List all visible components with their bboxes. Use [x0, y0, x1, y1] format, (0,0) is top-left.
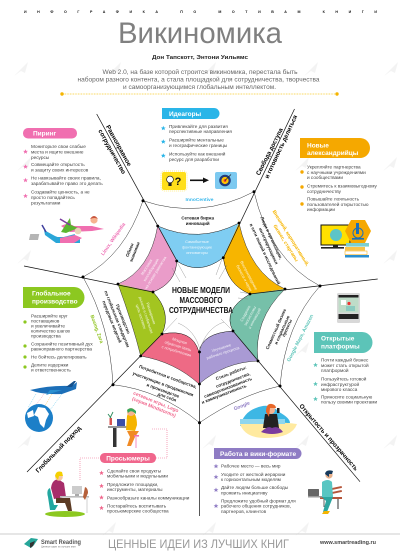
caption: pink — [134, 249, 168, 290]
list: Совмещайте открытость — [31, 161, 85, 167]
list: пользователей открытостью — [307, 201, 369, 207]
segment: blue — [158, 223, 239, 268]
pill: производство — [32, 298, 78, 306]
list: Приносите социальную — [321, 394, 373, 400]
list: партнеров, клиентов — [221, 509, 267, 514]
caption: blue: фонтанирующие — [182, 244, 212, 250]
list: Не бойтесь делегировать — [31, 354, 87, 360]
caption: teal — [238, 302, 262, 330]
pill: Открытые — [321, 336, 355, 342]
example: orange: бизнес, стартапы — [272, 223, 300, 263]
list: платформой — [321, 367, 349, 373]
segment: red — [141, 333, 199, 384]
axis: openness: Открытость и прозрачность — [297, 403, 359, 472]
axis: equal cooperation: Равноправное — [104, 124, 133, 168]
example labels — [88, 197, 315, 419]
list: поставщиков — [31, 318, 60, 324]
web nodes — [82, 190, 322, 424]
caption: red: Мощная — [172, 336, 188, 345]
label: work style: и коммуникативность — [201, 383, 247, 405]
list: Рабочее место — весь мир — [221, 464, 281, 468]
label: work style — [201, 365, 253, 405]
example: Boeing: Boeing, Zara — [88, 314, 104, 344]
list: и защиту своих интересов — [31, 168, 89, 172]
list: инструменты, материалы — [107, 487, 163, 492]
list — [221, 464, 296, 514]
slogan: ЦЕННЫЕ ИДЕИ ИЗ ЛУЧШИХ КНИГ — [108, 537, 289, 551]
caption: pink: Массовая — [139, 258, 153, 276]
caption: lime: цепь поставок — [135, 304, 148, 330]
label: joint business: проекты — [281, 318, 293, 337]
caption: red: с потребителями — [161, 344, 192, 358]
list: мобильными и модульными — [107, 474, 168, 478]
pill: Идеагоры — [169, 111, 202, 118]
authors: Дон Тапскотт, Энтони Уильямс — [152, 55, 248, 61]
example: Lego: (серия Mindstorms) — [131, 396, 177, 419]
list: просьюмерские сообщества — [107, 508, 169, 514]
caption: blue: инноваторы — [186, 250, 208, 255]
list: ресурс для разработки — [169, 157, 219, 162]
list: Стремитесь к взаимовыгодному — [307, 184, 378, 188]
list: мирового класса — [321, 387, 358, 392]
caption: orange: Воспроизведение — [239, 260, 259, 291]
centre heading — [169, 286, 233, 315]
label: knowledge exchange: знаниями — [128, 241, 141, 263]
list: пользу своими проектами — [321, 400, 377, 404]
label: knowledge exchange: Обмен — [125, 242, 135, 258]
label: production: Производство — [115, 304, 131, 335]
panel: new alexandrians — [300, 138, 378, 258]
bullets — [23, 149, 28, 198]
label: network exchange: инноваций — [186, 221, 210, 226]
axis: free access: и готовность делиться — [264, 114, 299, 180]
list: и сообществами — [307, 175, 343, 180]
white labels — [101, 216, 293, 405]
list: Постарайтесь воспитывать — [107, 502, 167, 508]
panel: wiki workplace — [214, 448, 302, 514]
caption: lime — [133, 294, 160, 336]
bullets — [300, 170, 304, 206]
connectors — [80, 429, 167, 480]
list: Привлекайте для развития — [169, 123, 228, 129]
caption: teal: Создание — [239, 304, 251, 322]
caption: red — [161, 334, 195, 358]
caption: red: обратная связь — [164, 339, 192, 352]
pill — [314, 332, 373, 353]
list — [31, 144, 103, 205]
list: к горизонтальным моделям — [221, 477, 281, 482]
label: network exchange — [181, 216, 215, 226]
list: и географические границы — [169, 143, 228, 148]
list: Создавайте ценность, а не — [31, 188, 90, 194]
list: Почти каждый бизнес — [321, 356, 369, 362]
axis: free access: Свобода доступа — [254, 126, 285, 177]
segment: purple — [199, 331, 258, 384]
intro text: набором разного контента, а стала площадкой для сотрудничества, творчества — [78, 76, 320, 84]
illustration: monitor and microscope — [321, 220, 371, 258]
bullets — [214, 464, 218, 508]
label: production: передовых моделей — [101, 300, 123, 344]
caption: blue — [182, 239, 212, 255]
segment: pink — [118, 226, 177, 292]
radial lines — [24, 109, 378, 516]
list: проявить инициативу — [221, 490, 268, 496]
list: информации — [307, 207, 335, 212]
caption: lime: Расширение — [145, 302, 157, 325]
segment: orange — [223, 223, 285, 294]
bullets — [161, 126, 166, 158]
list: с научными учреждениями — [307, 170, 366, 175]
label: network exchange: Сетевая биржа — [181, 216, 215, 220]
pill — [300, 138, 370, 158]
label: consumers — [132, 364, 198, 403]
intro text — [78, 69, 320, 91]
logo: Smart Reading — [41, 539, 81, 546]
list: равноправного партнерства — [31, 346, 92, 352]
list: места и ищите внешние — [31, 150, 84, 154]
web threads — [83, 192, 320, 423]
icon: target — [215, 172, 237, 189]
list: Делите издержки — [31, 362, 69, 368]
label: work style: сотрудничество, — [215, 371, 251, 389]
axis: equal cooperation: сотрудничество — [96, 128, 127, 176]
coloured segments — [118, 223, 285, 384]
segment captions — [133, 239, 262, 360]
list — [31, 312, 93, 372]
pill: платформы — [321, 344, 360, 350]
list: Уходите от жесткой иерархии — [221, 471, 286, 477]
list: рабочего общения сотрудников, — [221, 504, 291, 508]
panel: global production — [23, 287, 93, 372]
list: зарабатывайте право это делать — [31, 180, 103, 186]
list — [321, 356, 377, 404]
list: может стать открытой — [321, 362, 369, 368]
intro text: и самоорганизующимся глобальным интеллектом. — [123, 84, 276, 91]
list: Расширяйте круг — [31, 312, 68, 318]
intro text: Web 2.0, на базе которой строится викиномика, перестала быть — [102, 69, 298, 76]
bullets — [313, 362, 318, 401]
centre heading: НОВЫЕ МОДЕЛИ — [172, 286, 230, 295]
example: Google: Google — [233, 400, 251, 412]
list: и увеличивайте — [31, 322, 65, 328]
caption: teal: экосистемы — [243, 305, 257, 327]
caption: purple — [204, 340, 241, 360]
axis labels — [34, 114, 359, 474]
list: Предложите площадки, — [107, 482, 158, 487]
list — [107, 468, 190, 514]
list: производства — [31, 334, 61, 338]
arrow — [190, 178, 209, 183]
pill: Работа в вики-формате — [220, 450, 296, 458]
list: Разнообразьте каналы коммуникации — [107, 496, 190, 500]
caption: teal: и инноваций — [247, 307, 262, 330]
label: consumers: для себя — [157, 391, 177, 403]
list: количество шагов — [31, 328, 70, 334]
list: ресурсы — [31, 155, 50, 160]
pill: Новые — [307, 142, 329, 150]
list: и ответственность — [31, 368, 71, 372]
label: consumers: Потребители и сообщества, — [138, 364, 198, 389]
list: Повышайте лояльность — [307, 196, 360, 202]
list: Сохраняйте позитивный дух — [31, 340, 93, 346]
web diagram — [24, 109, 378, 516]
list: перспективные направления — [169, 129, 232, 134]
list: Используйте как внешний — [169, 150, 226, 156]
example: Google Maps: Google Maps, Amazon — [286, 314, 315, 363]
illustration: man on bench — [308, 470, 342, 514]
bullets — [23, 320, 27, 369]
panel: prosumers — [80, 429, 190, 514]
axis: global approach: Глобальный подход — [34, 424, 83, 474]
kicker: ИНФОГРАФИКА ПО МОТИВАМ КНИГИ — [24, 10, 377, 14]
list: Сделайте свои продукты — [107, 468, 162, 474]
label: people and organisations: в сети знаний и исследований — [249, 223, 281, 286]
footer — [0, 534, 400, 551]
label: people and organisations: Люди и организации, — [259, 216, 284, 260]
caption: purple: рабочего процесса — [206, 345, 241, 360]
logo: Ценные идеи из лучших книг — [41, 544, 76, 548]
caption: lime: рынков и глобальная — [138, 296, 154, 334]
centre heading: СОТРУДНИЧЕСТВА — [169, 306, 233, 315]
bullets — [99, 470, 104, 510]
panel: ideagoras — [161, 108, 237, 191]
label: people and organisations: интегрирующиеся — [258, 227, 279, 265]
panel: open platforms — [313, 332, 377, 404]
rule — [0, 533, 400, 535]
title: Викиномика — [118, 17, 282, 50]
pill: Глобальное — [32, 290, 71, 298]
example: Lego: сетевые игры, Lego — [132, 391, 179, 414]
list: Не навязывайте своих правила, — [31, 174, 101, 180]
segment: teal — [230, 289, 285, 361]
label: production: по глобальным стандартам — [103, 290, 131, 348]
list: сотрудничеству — [307, 189, 342, 194]
list — [169, 123, 232, 162]
label: joint business: и социальные — [273, 314, 291, 345]
label: consumers: участвующие в продвижении — [132, 371, 194, 397]
caption: orange: бизнеса и науки — [235, 264, 253, 292]
example: orange: Внешний, корпоративный, — [271, 209, 311, 268]
header — [24, 10, 377, 96]
pill: александрийцы — [307, 149, 359, 157]
illustration: person at desk — [108, 408, 139, 448]
illustration: girl on beach — [240, 404, 297, 438]
list — [307, 164, 378, 212]
label: joint business: Совместный бизнес — [265, 307, 287, 350]
illustration: tablet — [337, 293, 360, 323]
list: Расширяйте ментальные — [169, 136, 224, 142]
example: InnoCentive: InnoCentive — [186, 197, 214, 203]
centre heading: МАССОВОГО — [180, 296, 222, 305]
label: knowledge exchange — [123, 239, 141, 263]
dotted divider — [60, 92, 339, 96]
list: Пользуйтесь готовой — [321, 376, 367, 382]
label: work style: самоорганизованность — [203, 376, 253, 399]
pill: Пиринг — [33, 130, 57, 138]
list: Дайте людям больше свободы — [221, 484, 289, 490]
pill: Просьюмеры — [106, 456, 150, 462]
list: просто попадайтесь — [31, 194, 75, 200]
illustration: plane and globe — [25, 381, 77, 432]
illustration: person at computer — [45, 472, 89, 517]
url: www.smartreading.ru — [319, 540, 377, 546]
list: Укрепляйте партнерства — [307, 164, 361, 170]
pill — [23, 287, 84, 308]
label: work style: Стиль работы: — [215, 365, 248, 381]
list: инфраструктурой — [321, 381, 359, 387]
example: Linux: Linux, Wikipedia — [100, 222, 127, 257]
icon: idea: ? — [175, 176, 182, 188]
list: Предложите удобный формат для — [221, 498, 296, 504]
illustration: lying girls — [29, 216, 104, 243]
logo — [24, 538, 81, 548]
list: Мониторьте свои слабые — [31, 144, 86, 149]
caption: blue: Самобытные — [185, 239, 209, 244]
caption: pink: на основе равенства — [143, 255, 168, 290]
list: результатами — [31, 200, 61, 205]
segment: lime — [118, 284, 165, 356]
caption: pink: коллаборация — [142, 258, 160, 282]
label: consumers: и производстве — [146, 382, 181, 399]
panel: peering — [23, 128, 103, 205]
caption: purple: Улучшение — [211, 342, 232, 353]
